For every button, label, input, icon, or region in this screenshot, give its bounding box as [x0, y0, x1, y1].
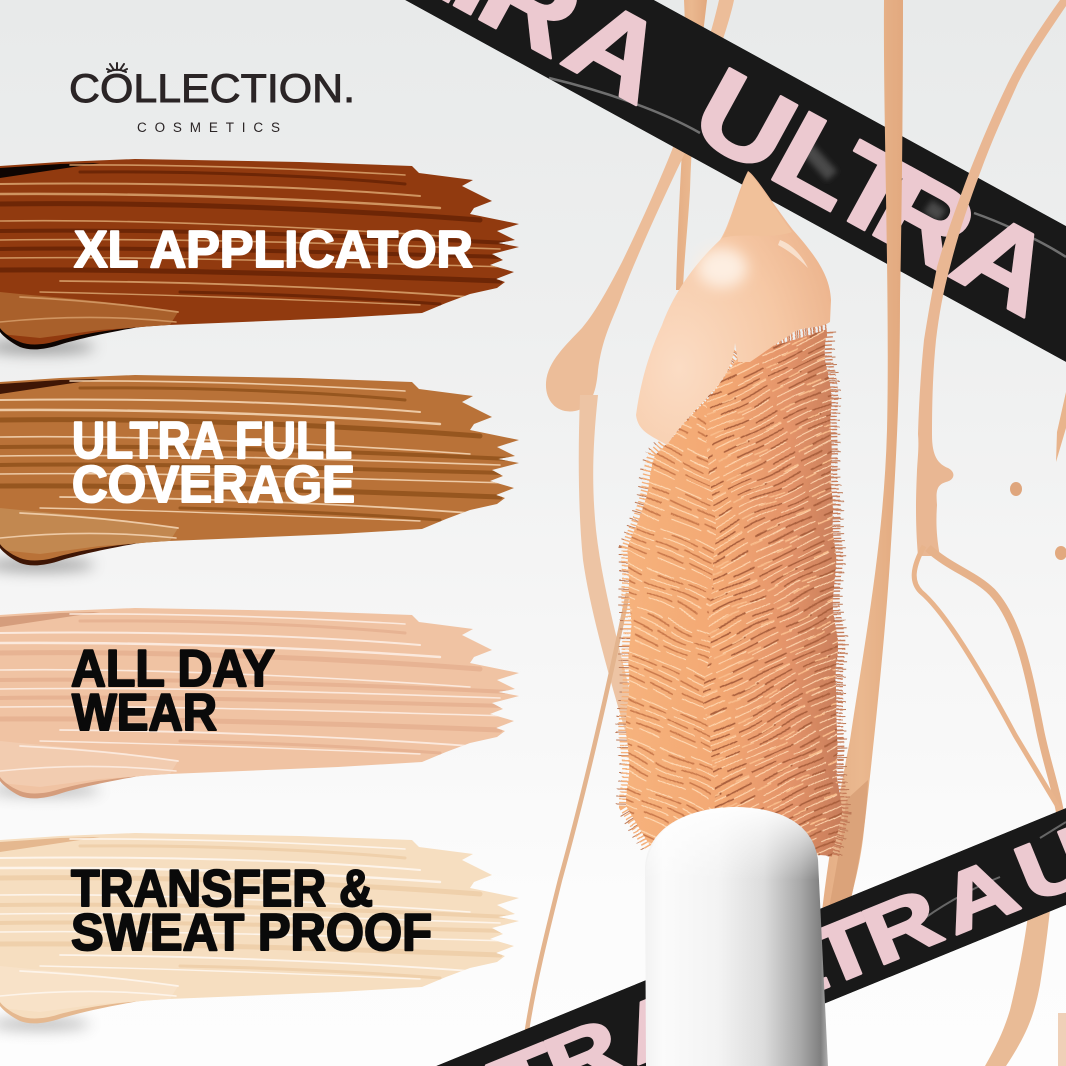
top black ULTRA band	[405, 0, 1066, 362]
swatch: ultra full coverage	[0, 366, 530, 576]
drips behind the top band	[546, 0, 734, 411]
brush stroke	[0, 599, 530, 809]
band sheen	[549, 78, 1066, 257]
bristles	[626, 330, 840, 856]
shadow	[0, 1018, 90, 1030]
sheen	[778, 240, 808, 268]
shadow	[0, 558, 95, 572]
shadow	[0, 784, 100, 796]
swatch: all day wear	[0, 599, 530, 809]
label: WEAR	[72, 684, 217, 742]
wordmark: COLLECTION.	[69, 67, 355, 111]
drip: thin stem	[676, 0, 707, 290]
white tube	[645, 807, 828, 1066]
drip: second stream behind bristles	[826, 780, 868, 925]
drip: right stream with knot	[916, 0, 1066, 556]
brush stroke	[0, 150, 530, 360]
right hair texture	[704, 330, 840, 856]
label: ALL DAY	[71, 640, 275, 698]
sheen	[697, 248, 747, 288]
drip: thin diagonal line	[527, 593, 628, 1030]
label: XL APPLICATOR	[74, 221, 473, 279]
band blotch	[806, 147, 942, 216]
left hair texture	[626, 400, 720, 850]
fringe of short hairs	[626, 330, 840, 856]
drip: right edge wedge	[1056, 392, 1066, 462]
label: TRANSFER &	[71, 860, 373, 918]
drop	[1055, 546, 1066, 560]
drip: long lower stem	[579, 395, 640, 760]
label: COVERAGE	[72, 456, 355, 514]
drip: left branch	[914, 546, 1060, 810]
label: ULTRA FULL	[72, 412, 352, 470]
fringe of long hairs	[626, 330, 840, 856]
drip: lower right ribbon	[985, 900, 1051, 1066]
bristle body	[626, 330, 840, 856]
drip: lower right edge stream	[1058, 1013, 1066, 1066]
drip: blob stream	[546, 0, 734, 411]
shadow	[0, 340, 95, 354]
drip: right branch	[928, 548, 1060, 812]
liquid drips over the top band	[527, 0, 1066, 1066]
logo	[69, 63, 355, 135]
brush stroke	[0, 824, 530, 1034]
applicator wand	[626, 171, 840, 1066]
tip highlight	[722, 172, 792, 238]
drop	[1010, 482, 1022, 496]
sub wordmark: COSMETICS	[137, 120, 280, 135]
band sheen	[925, 822, 1066, 918]
icon: crown	[107, 63, 127, 72]
brush stroke	[0, 366, 530, 576]
swatch: XL applicator	[0, 150, 530, 360]
drip: central stream	[820, 0, 903, 930]
bottom black ULTRA band	[436, 808, 1066, 1066]
label: SWEAT PROOF	[71, 904, 432, 962]
foundation blob	[636, 171, 831, 445]
swatch: transfer and sweat proof	[0, 824, 530, 1034]
